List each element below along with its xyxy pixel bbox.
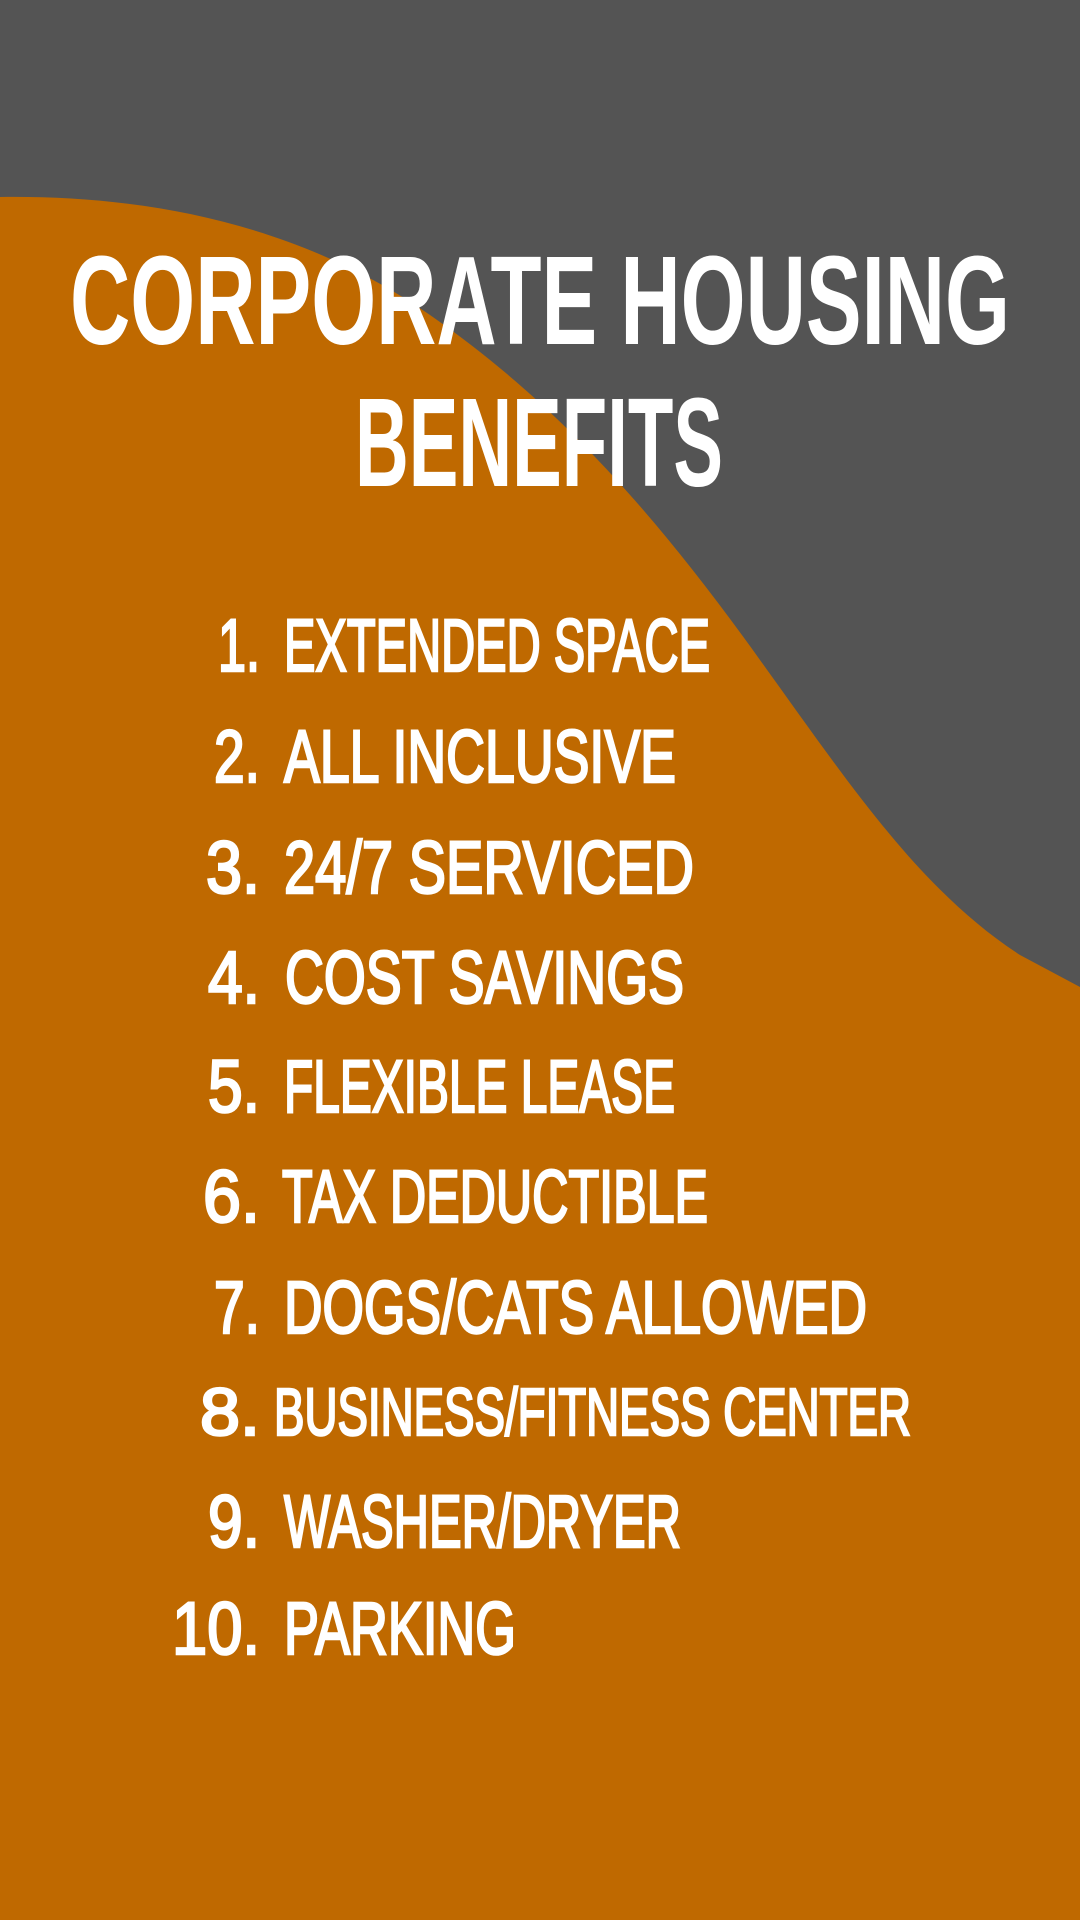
item 5 xyxy=(208,1045,675,1128)
numbered benefits list xyxy=(172,604,911,1670)
item 3: 3. xyxy=(206,826,260,909)
item 8: 8. xyxy=(200,1375,260,1450)
item 7: DOGS/CATS ALLOWED xyxy=(284,1266,867,1349)
item 6: 6. xyxy=(203,1155,260,1238)
item 6 xyxy=(203,1155,708,1238)
item 9: WASHER/DRYER xyxy=(284,1480,681,1563)
item 10: 10. xyxy=(172,1587,260,1670)
title xyxy=(70,230,1010,513)
item 2: ALL INCLUSIVE xyxy=(284,715,676,798)
item 7: 7. xyxy=(214,1266,260,1349)
item 7 xyxy=(214,1266,867,1349)
item 6: TAX DEDUCTIBLE xyxy=(282,1155,708,1238)
item 4 xyxy=(208,936,684,1019)
item 2 xyxy=(214,715,676,798)
item 5: 5. xyxy=(208,1045,260,1128)
item 1: 1. xyxy=(218,604,260,687)
title: BENEFITS xyxy=(355,372,723,513)
item 1 xyxy=(218,604,710,687)
item 9 xyxy=(208,1480,681,1563)
item 9: 9. xyxy=(208,1480,260,1563)
item 3: 24/7 SERVICED xyxy=(284,826,694,909)
item 4: COST SAVINGS xyxy=(285,936,684,1019)
item 2: 2. xyxy=(214,715,260,798)
item 5: FLEXIBLE LEASE xyxy=(284,1045,675,1128)
item 10 xyxy=(172,1587,516,1670)
item 3 xyxy=(206,826,694,909)
item 4: 4. xyxy=(208,936,260,1019)
item 1: EXTENDED SPACE xyxy=(284,604,710,687)
item 10: PARKING xyxy=(284,1587,516,1670)
